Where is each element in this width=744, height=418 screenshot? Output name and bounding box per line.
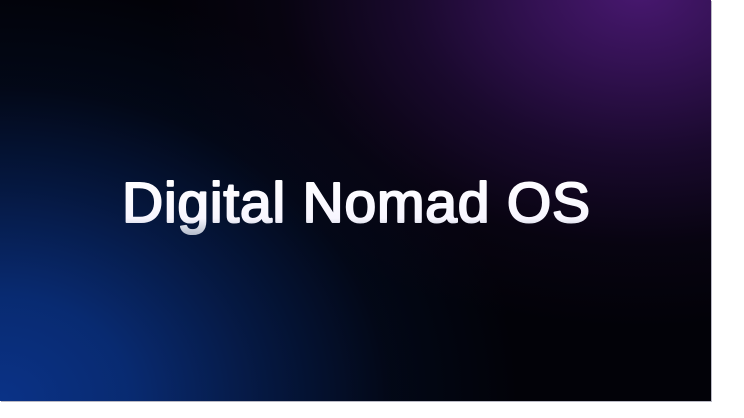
title: Digital Nomad OS	[122, 171, 590, 235]
